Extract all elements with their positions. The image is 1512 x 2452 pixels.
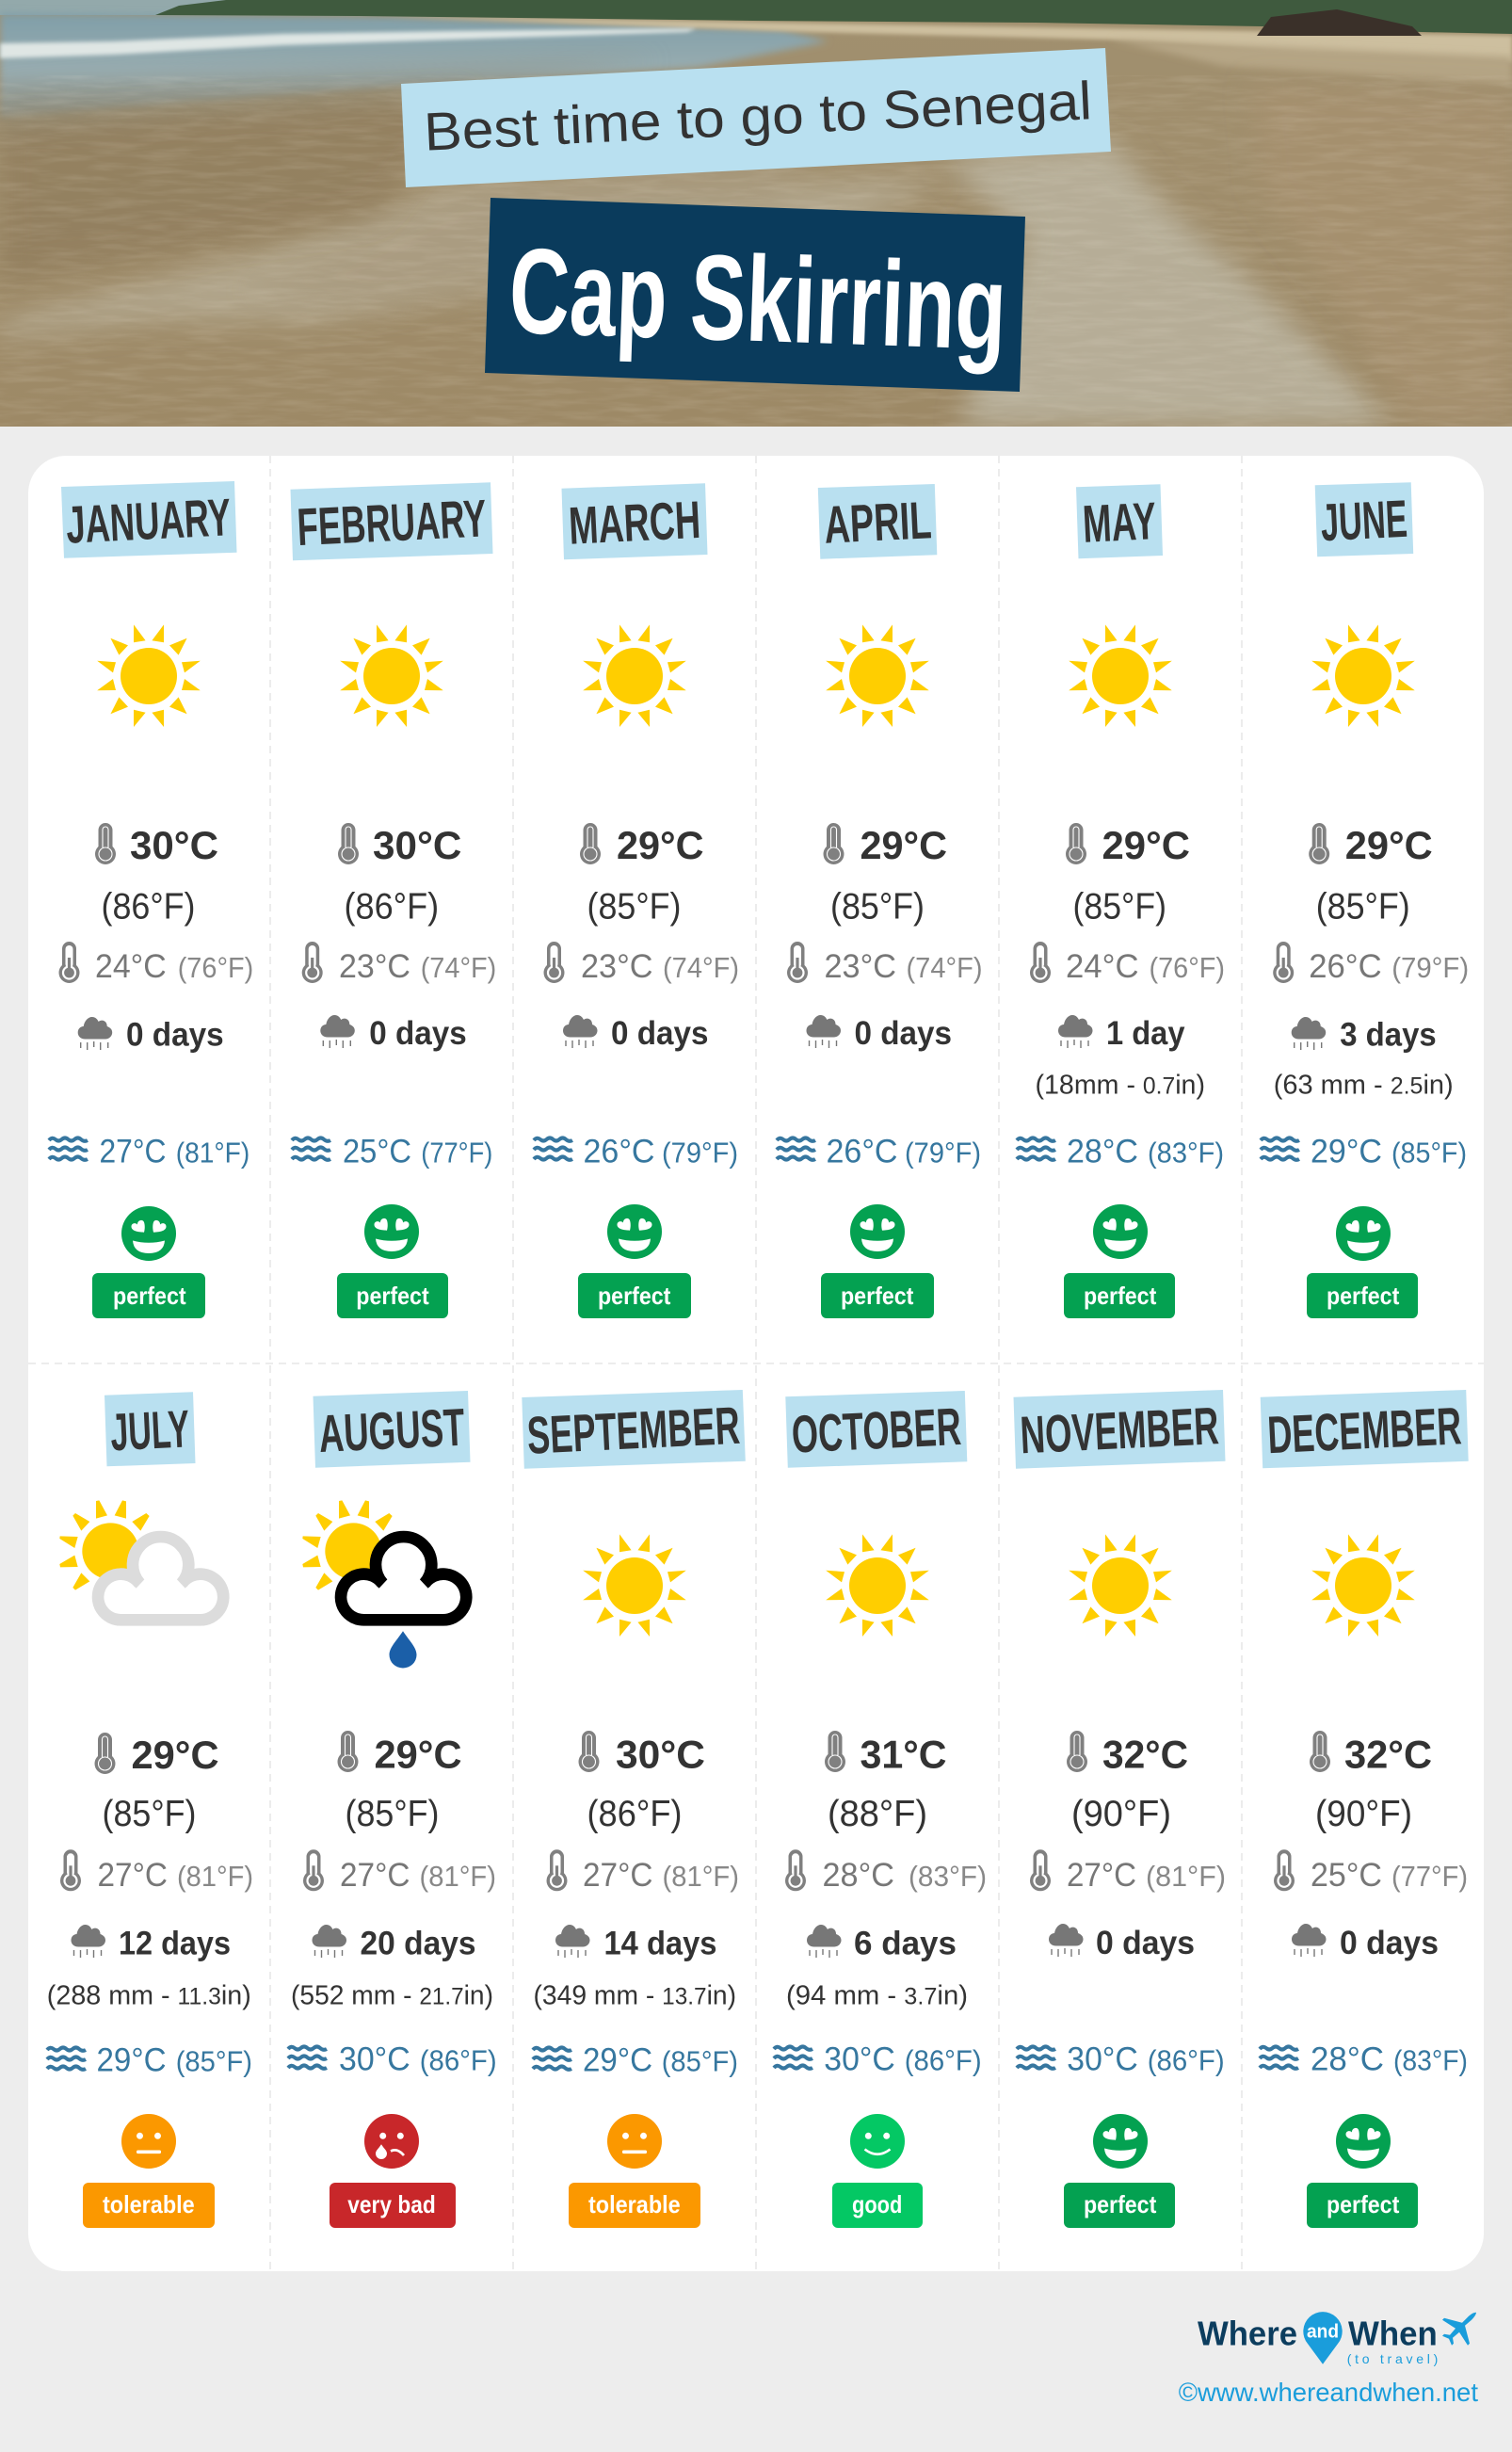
icon: thermometer low [785, 1849, 806, 1891]
icon: very bad face [364, 2114, 419, 2169]
icon: thermometer high [94, 1733, 115, 1774]
logo: Where and When to travel: (to travel) [1347, 2351, 1438, 2366]
low temperature: (76°F) [1149, 951, 1225, 984]
sea temperature: 28°C [1067, 1134, 1138, 1170]
badge: very bad [330, 2183, 456, 2228]
logo: Where and When to travel [1198, 2312, 1476, 2366]
icon: thermometer high [1067, 1731, 1087, 1772]
month: April [777, 484, 983, 1318]
header: beach photograph [0, 0, 1512, 427]
high temperature fahrenheit: (88°F) [828, 1794, 927, 1834]
rainy days: 1 day [1106, 1015, 1185, 1052]
low temperature: (74°F) [906, 951, 983, 984]
sea temperature [343, 1134, 492, 1170]
low temperature: (74°F) [663, 951, 739, 984]
heading: June [1315, 482, 1413, 557]
icon: sun behind light cloud [59, 1500, 223, 1620]
month: June [1261, 482, 1469, 1318]
heading: February: FEBRUARY [296, 488, 488, 557]
heading: October [785, 1391, 967, 1468]
icon: sun [1069, 1534, 1172, 1637]
low temperature: (83°F) [909, 1860, 987, 1893]
heading: January [61, 481, 237, 558]
rainy days: 0 days [855, 1015, 952, 1052]
sea temperature: 27°C [100, 1134, 166, 1170]
icon: sun [826, 624, 929, 727]
rainy days: 0 days [126, 1017, 224, 1053]
icon: tolerable face [121, 2114, 176, 2169]
badge: perfect [1307, 2183, 1418, 2228]
high temperature: 30°C [373, 823, 461, 867]
high temperature fahrenheit: (85°F) [1073, 887, 1166, 927]
icon: sun [340, 624, 443, 727]
icon: perfect face [1336, 2114, 1391, 2169]
high temperature fahrenheit: (85°F) [830, 887, 925, 927]
sea temperature: (81°F) [176, 1136, 249, 1170]
icon: sea waves [777, 1137, 815, 1160]
sea temperature [1311, 1134, 1467, 1170]
sea temperature [96, 2041, 252, 2079]
low temperature [825, 948, 983, 985]
heading: November: NOVEMBER [1019, 1395, 1220, 1464]
badge: perfect: perfect [1327, 2190, 1400, 2218]
icon: perfect face [364, 1204, 419, 1259]
rainy days: 0 days [611, 1015, 708, 1052]
heading: April [818, 484, 937, 559]
icon: sun behind black rain cloud [302, 1500, 466, 1669]
sea temperature: 25°C [343, 1134, 411, 1170]
heading: September: SEPTEMBER [525, 1395, 741, 1465]
low temperature: (76°F) [178, 951, 253, 984]
rainfall amount: (349 mm - 13.7in) [533, 1980, 736, 2010]
rainy days: 14 days [604, 1926, 717, 1962]
title banner: Cap Skirring [485, 198, 1025, 392]
heading: May [1076, 484, 1163, 558]
title banner: Cap Skirring: Cap Skirring [507, 223, 1008, 376]
icon: thermometer low [303, 1849, 324, 1891]
sea temperature: 28°C [1311, 2041, 1384, 2077]
icon: thermometer low [1273, 942, 1294, 983]
sea temperature [339, 2041, 497, 2077]
sea temperature: 29°C [583, 2041, 652, 2079]
logo: Where and When to travel: and [1307, 2322, 1339, 2343]
icon: perfect face [607, 1204, 662, 1259]
low temperature: (81°F) [1146, 1860, 1226, 1893]
sea temperature: (85°F) [1391, 1136, 1467, 1170]
badge: perfect: perfect [1084, 1282, 1157, 1310]
month: October [774, 1391, 987, 2228]
heading: September [522, 1390, 746, 1469]
icon: thermometer low [787, 942, 808, 983]
low temperature: 23°C [339, 948, 410, 985]
rainfall amount: (18mm - 0.7in) [1036, 1071, 1205, 1101]
icon: perfect face [1336, 1206, 1391, 1261]
website credit: ©www.whereandwhen.net [1179, 2378, 1478, 2407]
rainfall amount: (94 mm - 3.7in) [786, 1980, 968, 2010]
high temperature: 30°C [130, 823, 218, 867]
sea temperature [584, 1134, 738, 1170]
icon: thermometer low [1030, 1849, 1051, 1891]
sea temperature [827, 1134, 981, 1170]
high temperature: 29°C [132, 1733, 218, 1777]
icon: good face [850, 2114, 905, 2169]
high temperature: 32°C [1102, 1732, 1188, 1776]
badge: good [832, 2183, 923, 2228]
icon: map pin [1303, 2312, 1343, 2364]
heading: July [105, 1392, 196, 1466]
sea temperature [1067, 2041, 1225, 2077]
icon: perfect face [1093, 1204, 1148, 1259]
low temperature: 27°C [98, 1857, 168, 1894]
rainy days: 6 days [854, 1926, 957, 1962]
icon: sun [826, 1534, 929, 1637]
low temperature: 28°C [823, 1857, 894, 1894]
high temperature: 29°C [1102, 823, 1190, 867]
high temperature: 29°C [861, 823, 947, 867]
sea temperature [1067, 1134, 1224, 1170]
rainy days: 20 days [360, 1926, 476, 1962]
sea temperature [1311, 2041, 1468, 2077]
sea temperature: 30°C [824, 2041, 895, 2077]
low temperature [95, 948, 253, 985]
icon: rain cloud [1292, 1924, 1326, 1957]
sea temperature: 30°C [339, 2041, 410, 2077]
sea temperature: (86°F) [905, 2043, 982, 2077]
icon: rain cloud [78, 1017, 112, 1050]
low temperature [98, 1857, 253, 1894]
icon: rain cloud [807, 1925, 842, 1958]
high temperature: 29°C [1345, 823, 1433, 867]
high temperature fahrenheit: (85°F) [102, 1794, 196, 1834]
heading: May: MAY [1082, 491, 1158, 554]
heading: August: AUGUST [317, 1397, 466, 1463]
icon: sun [583, 1534, 686, 1637]
badge: perfect [578, 1273, 691, 1318]
low temperature [1066, 948, 1225, 985]
icon: sea waves [774, 2047, 812, 2069]
icon: thermometer low [302, 942, 323, 983]
month: January [49, 481, 253, 1318]
badge: perfect [92, 1273, 205, 1318]
rainy days: 12 days [119, 1926, 231, 1962]
sea temperature: 26°C [827, 1134, 898, 1170]
sea temperature [100, 1134, 249, 1170]
rainy days: 0 days [1340, 1925, 1439, 1961]
month: March [534, 483, 739, 1318]
heading: February [290, 482, 493, 560]
low temperature [340, 1857, 496, 1894]
heading: August [313, 1391, 471, 1468]
low temperature [339, 948, 496, 985]
high temperature fahrenheit: (90°F) [1071, 1794, 1171, 1834]
badge: perfect [337, 1273, 448, 1318]
icon: sea waves [534, 1137, 572, 1160]
badge: perfect [1307, 1273, 1418, 1318]
high temperature: 29°C [617, 823, 704, 867]
month: November [1013, 1390, 1226, 2228]
sea temperature: (86°F) [420, 2043, 497, 2077]
sea temperature: 29°C [1311, 1134, 1382, 1170]
icon: thermometer low [60, 1849, 81, 1891]
rainfall amount: (63 mm - 2.5in) [1274, 1071, 1454, 1101]
heading: July: JULY [109, 1398, 191, 1461]
icon: thermometer high [580, 823, 601, 864]
icon: sea waves [292, 1137, 330, 1160]
icon: sea waves [1017, 2047, 1055, 2069]
icon: thermometer high [823, 823, 844, 864]
heading: October: OCTOBER [790, 1396, 962, 1464]
rainy days: 3 days [1340, 1017, 1437, 1054]
high temperature: 29°C [375, 1732, 461, 1776]
badge: tolerable [569, 2183, 700, 2228]
icon: thermometer low [58, 942, 79, 983]
badge: perfect: perfect [598, 1282, 671, 1310]
badge: very bad: very bad [347, 2190, 436, 2218]
icon: sun [1311, 624, 1415, 727]
high temperature fahrenheit: (85°F) [587, 887, 682, 927]
low temperature: (81°F) [663, 1860, 739, 1893]
low temperature: (74°F) [421, 951, 496, 984]
icon: rain cloud [1292, 1017, 1326, 1050]
icon: sun [1069, 624, 1172, 727]
icon: perfect face [1093, 2114, 1148, 2169]
icon: rain cloud [313, 1925, 346, 1958]
icon: sea waves [49, 1137, 88, 1160]
sea temperature [824, 2041, 982, 2077]
month: December [1260, 1390, 1469, 2228]
high temperature: 31°C [861, 1732, 947, 1776]
badge: perfect: perfect [1084, 2190, 1157, 2218]
high temperature fahrenheit: (90°F) [1315, 1794, 1412, 1834]
icon: sun [1311, 1534, 1415, 1637]
low temperature [1067, 1857, 1226, 1894]
sea temperature: (79°F) [905, 1136, 981, 1170]
sea temperature: (85°F) [662, 2045, 738, 2077]
low temperature [823, 1857, 987, 1894]
heading: March [561, 483, 708, 559]
icon: thermometer high [338, 823, 359, 864]
icon: sea waves [1261, 1137, 1299, 1160]
icon: sea waves [47, 2047, 86, 2070]
month: July [47, 1392, 253, 2228]
low temperature [1309, 948, 1469, 985]
icon: plane [1442, 2313, 1476, 2346]
icon: perfect face [850, 1204, 905, 1259]
high temperature: 30°C [616, 1732, 705, 1776]
icon: thermometer low [1274, 1849, 1295, 1891]
icon: sun [583, 624, 686, 727]
low temperature: 23°C [581, 948, 653, 985]
low temperature [583, 1857, 739, 1894]
high temperature fahrenheit: (86°F) [345, 887, 439, 927]
icon: rain cloud [1058, 1015, 1092, 1048]
icon: rain cloud [72, 1925, 105, 1958]
badge: perfect [1064, 1273, 1175, 1318]
low temperature: 26°C [1309, 948, 1382, 985]
sea temperature: 30°C [1067, 2041, 1138, 2077]
sea temperature: 26°C [584, 1134, 655, 1170]
icon: thermometer high [578, 1731, 599, 1772]
icon: rain cloud [806, 1015, 841, 1048]
rainfall amount: (288 mm - 11.3in) [47, 1980, 251, 2010]
badge: good: good [852, 2190, 902, 2218]
month: August [288, 1391, 497, 2228]
icon: sun [97, 624, 201, 727]
icon: thermometer high [337, 1731, 358, 1772]
heading: April: APRIL [823, 490, 933, 555]
badge: perfect [1064, 2183, 1175, 2228]
high temperature fahrenheit: (85°F) [1316, 887, 1410, 927]
icon: thermometer low [1030, 942, 1051, 983]
sea temperature: (83°F) [1393, 2043, 1468, 2077]
icon: rain cloud [1049, 1924, 1083, 1957]
low temperature: 24°C [1066, 948, 1139, 985]
low temperature: (81°F) [177, 1860, 253, 1893]
heading: June: JUNE [1319, 489, 1408, 552]
title banner: Best time to go to Senegal: Best time to go to Senegal [423, 71, 1093, 163]
sea temperature [583, 2041, 738, 2079]
icon: sea waves [1260, 2047, 1298, 2069]
badge: perfect: perfect [1327, 1282, 1400, 1310]
icon: thermometer high [1310, 1731, 1330, 1772]
icon: thermometer high [825, 1731, 845, 1772]
icon: perfect face [121, 1206, 176, 1261]
logo: Where and When to travel: When [1348, 2315, 1438, 2353]
low temperature [581, 948, 739, 985]
low temperature: (77°F) [1391, 1860, 1468, 1893]
icon: rain cloud [555, 1925, 589, 1958]
badge: perfect: perfect [113, 1282, 186, 1310]
heading: March: MARCH [568, 490, 702, 556]
month: May [1017, 484, 1225, 1318]
icon: rain cloud [320, 1015, 355, 1048]
icon: sea waves [1017, 1137, 1055, 1160]
low temperature: 25°C [1311, 1857, 1382, 1894]
heading: November [1013, 1390, 1226, 1469]
badge: perfect: perfect [841, 1282, 914, 1310]
badge: perfect: perfect [356, 1282, 429, 1310]
badge: tolerable: tolerable [588, 2190, 681, 2218]
title banner: Best time to go to Senegal [401, 48, 1111, 187]
icon: sea waves [533, 2047, 571, 2070]
high temperature fahrenheit: (85°F) [345, 1794, 439, 1834]
sea temperature: (86°F) [1148, 2043, 1225, 2077]
low temperature [1311, 1857, 1468, 1894]
low temperature: 23°C [825, 948, 896, 985]
sea temperature: 29°C [96, 2041, 166, 2079]
badge: tolerable [83, 2183, 215, 2228]
badge: perfect [821, 1273, 934, 1318]
low temperature: 27°C [1067, 1857, 1136, 1894]
sea temperature: (83°F) [1148, 1136, 1224, 1170]
low temperature: 24°C [95, 948, 167, 985]
rainy days: 0 days [1096, 1925, 1195, 1961]
rainy days: 0 days [369, 1015, 467, 1052]
sea temperature: (79°F) [662, 1136, 738, 1170]
rainfall amount: (552 mm - 21.7in) [291, 1980, 493, 2010]
icon: thermometer high [1066, 823, 1086, 864]
low temperature: 27°C [583, 1857, 653, 1894]
high temperature fahrenheit: (86°F) [102, 887, 196, 927]
icon: rain cloud [563, 1015, 597, 1048]
month: February [290, 482, 496, 1318]
panel: monthly calendar card [28, 456, 1484, 2271]
logo: Where and When to travel: Where [1198, 2315, 1297, 2353]
icon: thermometer high [1309, 823, 1329, 864]
low temperature: (81°F) [420, 1860, 496, 1893]
badge: tolerable: tolerable [103, 2190, 195, 2218]
low temperature: 27°C [340, 1857, 410, 1894]
high temperature: 32°C [1344, 1732, 1432, 1776]
icon: thermometer low [546, 1849, 567, 1891]
sea temperature: (85°F) [176, 2045, 252, 2077]
low temperature: (79°F) [1391, 951, 1469, 984]
month: September [522, 1390, 746, 2228]
icon: thermometer high [95, 823, 116, 864]
sea temperature: (77°F) [421, 1136, 492, 1170]
icon: thermometer low [544, 942, 565, 983]
icon: tolerable face [607, 2114, 662, 2169]
high temperature fahrenheit: (86°F) [587, 1794, 682, 1834]
heading: January: JANUARY [65, 487, 232, 555]
icon: sea waves [288, 2047, 327, 2069]
